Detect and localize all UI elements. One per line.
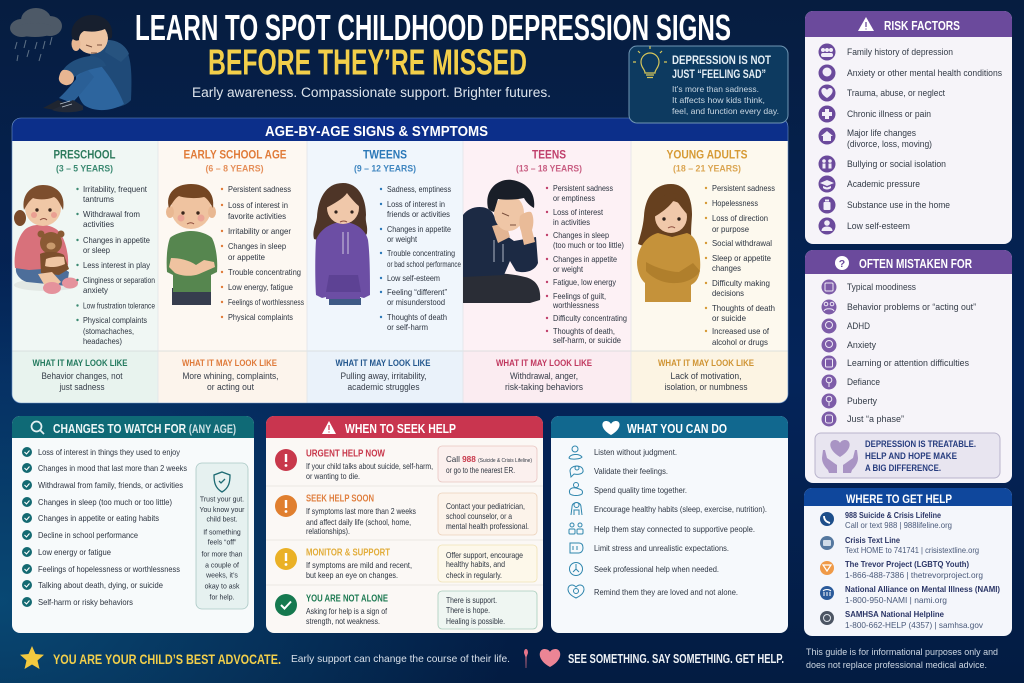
what it may look like: tweens: Pulling away, irritability, <box>340 371 426 381</box>
row: urgent help now: If your child talks about suicide, self-harm, <box>306 461 433 471</box>
icon: pin <box>524 649 528 668</box>
row: you are not alone: strength, not weakness. <box>306 616 380 626</box>
symptom list: preschool: Low frustration tolerance <box>83 300 155 310</box>
checklist: Decline in school performance <box>38 530 138 540</box>
symptom list: tweens: or self-harm <box>387 322 428 332</box>
row: seek help soon: relationships). <box>306 526 350 536</box>
column: tweens: (9 – 12 YEARS) <box>354 164 416 174</box>
what it may look like: young adults: WHAT IT MAY LOOK LIKE <box>658 358 754 369</box>
icons: support actions <box>568 446 584 598</box>
illustration: girl in purple hoodie <box>313 183 370 305</box>
symptom list: early school age: Physical complaints <box>228 312 293 322</box>
symptom list: preschool: or sleep <box>83 245 110 255</box>
column: young adults <box>637 148 775 392</box>
action list: Encourage healthy habits (sleep, exercise, nutrition). <box>594 504 767 514</box>
symptom list: teens <box>546 183 627 345</box>
callout: trust your gut: If something <box>203 530 241 536</box>
risk list: Bullying or social isolation <box>847 159 946 169</box>
column: young adults: YOUNG ADULTS <box>666 148 748 162</box>
column: tweens: TWEENS <box>363 148 407 162</box>
what it may look like: young adults <box>658 358 754 392</box>
symptom list: early school age: Low energy, fatigue <box>228 282 293 292</box>
checklist: Feelings of hopelessness or worthlessness <box>38 564 180 574</box>
disclaimer: This guide is for informational purposes only and <box>806 647 998 657</box>
symptom list: teens: in activities <box>553 217 590 227</box>
illustration: sad boy hugging knees <box>43 15 131 112</box>
footer banner <box>20 646 784 669</box>
helpline list: 988 Suicide & Crisis Lifeline <box>845 510 941 520</box>
column: early school age: (6 – 8 YEARS) <box>206 164 264 174</box>
subtitle: Early awareness. Compassionate support. Brighter futures. <box>192 85 551 100</box>
row: you are not alone: YOU ARE NOT ALONE <box>306 592 388 604</box>
symptom list: tweens <box>380 184 461 332</box>
callout: trust your gut: for more than <box>202 552 243 558</box>
helpline list <box>845 510 1000 630</box>
early support line: Early support can change the course of their life. <box>291 653 510 665</box>
symptom list: early school age: Feelings of worthlessness <box>228 297 304 307</box>
row: monitor and support: MONITOR & SUPPORT <box>306 546 390 558</box>
callout: trust your gut: Trust your gut. <box>200 496 244 504</box>
column: young adults: (18 – 21 YEARS) <box>673 164 741 174</box>
symptom list: teens: Loss of interest <box>553 207 604 217</box>
row: seek help soon: SEEK HELP SOON <box>306 492 374 504</box>
symptom list: early school age: Trouble concentrating <box>228 267 301 277</box>
row: monitor and support: Offer support, encourage <box>446 550 523 560</box>
symptom list: teens: Feelings of guilt, <box>553 291 606 301</box>
symptom list: young adults: Thoughts of death <box>712 303 775 313</box>
panel: when to seek help <box>266 416 543 633</box>
symptom list: tweens: Loss of interest in <box>387 199 445 209</box>
mistaken-for list <box>847 282 976 424</box>
icon: rain cloud <box>10 8 62 61</box>
callout: trust your gut: for help. <box>210 594 235 602</box>
what it may look like: early school age: or acting out <box>207 382 255 392</box>
symptom list: teens: Changes in appetite <box>553 254 617 264</box>
icon: hands holding heart <box>822 440 858 473</box>
what it may look like: teens: risk-taking behaviors <box>505 382 584 392</box>
symptom list: early school age: Irritability or anger <box>228 226 291 236</box>
symptom list: teens: (too much or too little) <box>553 240 624 250</box>
symptom list: early school age: Changes in sleep <box>228 241 286 251</box>
disclaimer: does not replace professional medical advice. <box>806 660 987 670</box>
heading: what you can do: WHAT YOU CAN DO <box>627 421 727 436</box>
symptom list: preschool: tantrums <box>83 194 114 204</box>
what it may look like: tweens: academic struggles <box>348 382 420 392</box>
symptom list: tweens: Trouble concentrating <box>387 248 455 258</box>
mistaken-for list: Learning or attention difficulties <box>847 358 969 368</box>
action list: Help them stay connected to supportive people. <box>594 524 755 534</box>
symptom list: young adults: decisions <box>712 288 744 298</box>
icons: mistaken for <box>822 280 836 426</box>
checklist: Changes in mood that last more than 2 weeks <box>38 463 187 473</box>
icons: risk factors <box>818 44 836 234</box>
symptom list: tweens: or bad school performance <box>387 259 461 269</box>
callout: depression is not just feeling sad <box>629 46 788 123</box>
see something slogan: SEE SOMETHING. SAY SOMETHING. GET HELP. <box>568 652 784 666</box>
symptom list: teens: or weight <box>553 264 584 274</box>
callout: depression is not just feeling sad: DEPRESSION IS NOT <box>672 55 771 67</box>
illustration: girl with teddy bear <box>14 185 78 294</box>
heading: risk factors <box>858 17 960 33</box>
what it may look like: preschool: WHAT IT MAY LOOK LIKE <box>32 358 128 369</box>
heading: often mistaken for <box>835 256 972 271</box>
symptom list: young adults: Sleep or appetite <box>712 253 771 263</box>
what it may look like: early school age: WHAT IT MAY LOOK LIKE <box>182 358 277 369</box>
row: you are not alone: There is support. <box>446 595 497 605</box>
action list: Spend quality time together. <box>594 485 687 495</box>
illustration: young adult with crossed arms <box>637 184 700 302</box>
checklist: Self-harm or risky behaviors <box>38 597 133 607</box>
heading: what you can do <box>602 421 727 436</box>
action list: Limit stress and unrealistic expectations. <box>594 543 729 553</box>
callout: depression is not just feeling sad: JUST “FEELING SAD” <box>672 69 766 81</box>
risk list: Trauma, abuse, or neglect <box>847 88 945 98</box>
row: seek help soon: school counselor, or a <box>446 511 512 521</box>
checklist: Low energy or fatigue <box>38 547 111 557</box>
symptom list: tweens: Thoughts of death <box>387 312 447 322</box>
column: early school age <box>166 148 304 392</box>
what it may look like: tweens <box>336 358 430 392</box>
heading: often mistaken for: OFTEN MISTAKEN FOR <box>859 256 972 271</box>
icon: shield <box>214 472 230 492</box>
symptom list: young adults: or suicide <box>712 313 746 323</box>
panel: what you can do <box>551 416 788 633</box>
row: urgent help now: Call 988 (Suicide & Crisis Lifeline) <box>446 454 532 464</box>
symptom list: preschool: activities <box>83 219 114 229</box>
symptom list: tweens: Changes in appetite <box>387 224 451 234</box>
helpline list: 1-800-662-HELP (4357) | samhsa.gov <box>845 620 984 630</box>
row: seek help soon: mental health professional. <box>446 521 529 531</box>
symptom list: preschool: (stomachaches, <box>83 326 134 336</box>
row: you are not alone: Asking for help is a sign of <box>306 606 388 616</box>
column: preschool: (3 – 5 YEARS) <box>56 164 113 174</box>
action list: Remind them they are loved and not alone. <box>594 587 738 597</box>
panel: changes to watch for <box>12 416 254 633</box>
symptom list: teens: or emptiness <box>553 193 595 203</box>
symptom list: teens: Changes in sleep <box>553 230 609 240</box>
risk list: Academic pressure <box>847 179 920 189</box>
advocate slogan: YOU ARE YOUR CHILD’S BEST ADVOCATE. <box>53 652 281 667</box>
helpline list: Text HOME to 741741 | crisistextline.org <box>845 545 979 555</box>
heading: age-by-age: AGE-BY-AGE SIGNS & SYMPTOMS <box>265 123 488 140</box>
mistaken-for list: Defiance <box>847 377 880 387</box>
callout: depression is treatable: DEPRESSION IS TREATABLE. <box>865 439 976 450</box>
checklist: Changes in appetite or eating habits <box>38 513 159 523</box>
symptom list: preschool: Irritability, frequent <box>83 184 148 194</box>
symptom list: teens: Difficulty concentrating <box>553 313 627 323</box>
heading: changes: CHANGES TO WATCH FOR (ANY AGE) <box>53 421 236 436</box>
mistaken-for list: Just “a phase” <box>847 414 904 424</box>
heading: often mistaken for: ? <box>839 258 845 270</box>
helpline list: The Trevor Project (LGBTQ Youth) <box>845 559 969 569</box>
title: BEFORE THEY’RE MISSED <box>208 42 527 82</box>
icon: heart <box>540 649 560 667</box>
callout: trust your gut: okay to ask <box>205 584 240 590</box>
column: preschool: PRESCHOOL <box>54 148 116 162</box>
column: early school age: EARLY SCHOOL AGE <box>184 148 286 162</box>
row: monitor and support: healthy habits, and <box>446 559 505 569</box>
symptom list: preschool: anxiety <box>83 285 109 295</box>
symptom list: early school age: Persistent sadness <box>228 184 291 194</box>
callout: depression is treatable: A BIG DIFFERENCE. <box>865 463 941 474</box>
action list: Seek professional help when needed. <box>594 564 719 574</box>
panel: where to get help <box>804 488 1012 636</box>
column: preschool <box>14 148 155 392</box>
row: seek help soon: and affect daily life (school, home, <box>306 517 411 527</box>
column: teens <box>463 148 627 392</box>
row: urgent help now <box>275 446 537 482</box>
panel: risk factors <box>805 11 1012 244</box>
helpline list: SAMHSA National Helpline <box>845 609 944 619</box>
helpline list: 1-800-950-NAMI | nami.org <box>845 595 947 605</box>
symptom list: preschool: Changes in appetite <box>83 235 150 245</box>
symptom list: teens: Persistent sadness <box>553 183 613 193</box>
panel: age-by-age signs and symptoms <box>12 118 788 403</box>
symptom list: teens: Thoughts of death, <box>553 326 615 336</box>
row: monitor and support: check in regularly. <box>446 570 502 580</box>
symptom list: young adults: Social withdrawal <box>712 238 772 248</box>
callout: depression is treatable: HELP AND HOPE MAKE <box>865 451 957 462</box>
symptom list: preschool: Withdrawal from <box>83 209 140 219</box>
checklist: Changes in sleep (too much or too little) <box>38 497 172 507</box>
icon: magnifier <box>32 422 44 434</box>
what it may look like: preschool: just sadness <box>59 382 105 392</box>
mistaken-for list: Behavior problems or “acting out” <box>847 302 976 312</box>
mistaken-for list: Anxiety <box>847 340 876 350</box>
callout: trust your gut: child best. <box>206 516 238 524</box>
symptom list: early school age: favorite activities <box>228 211 286 221</box>
what it may look like: young adults: Lack of motivation, <box>670 371 742 381</box>
symptom list: preschool: Clinginess or separation <box>83 275 155 285</box>
title <box>135 7 731 82</box>
action list <box>594 447 767 597</box>
symptom list: young adults: or purpose <box>712 224 749 234</box>
symptom list: teens: self-harm, or suicide <box>553 335 621 345</box>
checklist: Loss of interest in things they used to enjoy <box>38 447 181 457</box>
symptom list: young adults: Persistent sadness <box>712 183 775 193</box>
symptom list: teens: Fatigue, low energy <box>553 277 617 287</box>
risk list <box>847 47 1002 231</box>
callout: trust your gut: a couple of <box>205 562 239 570</box>
heading: risk factors: RISK FACTORS <box>884 18 960 33</box>
column: teens: (13 – 18 YEARS) <box>516 164 582 174</box>
icon: star <box>20 646 44 669</box>
row: you are not alone: Healing is possible. <box>446 616 505 626</box>
row: monitor and support: If symptoms are mild and recent, <box>306 560 412 570</box>
symptom list: young adults: alcohol or drugs <box>712 337 768 347</box>
action list: Listen without judgment. <box>594 447 677 457</box>
symptom list: early school age <box>221 184 304 322</box>
helpline list: National Alliance on Mental Illness (NAMI) <box>845 584 1000 594</box>
heading: when to seek help: WHEN TO SEEK HELP <box>345 421 456 436</box>
risk list: Family history of depression <box>847 47 953 57</box>
row: monitor and support <box>275 545 537 582</box>
panel: often mistaken for <box>805 250 1012 483</box>
title: LEARN TO SPOT CHILDHOOD DEPRESSION SIGNS <box>135 7 731 48</box>
risk list: Substance use in the home <box>847 200 950 210</box>
symptom list: tweens: Sadness, emptiness <box>387 184 451 194</box>
callout: trust your gut: feels “off” <box>208 540 237 546</box>
illustration: teen holding head <box>463 180 540 303</box>
symptom list: early school age: Loss of interest in <box>228 200 288 210</box>
row: urgent help now: URGENT HELP NOW <box>306 448 385 460</box>
what it may look like: tweens: WHAT IT MAY LOOK LIKE <box>336 358 430 369</box>
symptom list: young adults: Loss of direction <box>712 213 768 223</box>
mistaken-for list: ADHD <box>847 321 870 331</box>
symptom list: young adults: Increased use of <box>712 326 770 336</box>
what it may look like: early school age: More whining, complaints, <box>182 371 278 381</box>
what it may look like: teens <box>496 358 592 392</box>
symptom list: tweens: Feeling “different” <box>387 287 447 297</box>
action list: Validate their feelings. <box>594 466 668 476</box>
symptom list: preschool: headaches) <box>83 336 122 346</box>
checklist: Withdrawal from family, friends, or activities <box>38 480 183 490</box>
illustration: boy with crossed arms <box>166 184 217 305</box>
symptom list: preschool: Physical complaints <box>83 315 147 325</box>
row: seek help soon <box>275 492 537 536</box>
symptom list: tweens: or misunderstood <box>387 297 445 307</box>
mistaken-for list: Puberty <box>847 396 877 406</box>
symptom list: young adults: changes <box>712 263 741 273</box>
row: seek help soon: If symptoms last more than 2 weeks <box>306 506 416 516</box>
callout: trust your gut <box>196 463 248 609</box>
symptom list: young adults <box>705 183 775 347</box>
row: you are not alone <box>275 591 537 629</box>
symptom list: tweens: or weight <box>387 234 418 244</box>
symptom list: young adults: Hopelessness <box>712 198 758 208</box>
row: urgent help now: or go to the nearest ER. <box>446 465 515 475</box>
mistaken-for list: Typical moodiness <box>847 282 916 292</box>
symptom list: preschool: Less interest in play <box>83 260 151 270</box>
callout: depression is treatable <box>815 433 1000 478</box>
risk list: (divorce, loss, moving) <box>847 139 932 149</box>
what it may look like: early school age <box>182 358 278 392</box>
callout: depression is not just feeling sad: feel, and function every day. <box>672 106 779 116</box>
symptom list: teens: worthlessness <box>552 300 599 310</box>
what it may look like: preschool: Behavior changes, not <box>42 371 123 381</box>
checklist: Talking about death, dying, or suicide <box>38 580 163 590</box>
icons: helplines <box>820 512 834 625</box>
symptom list: tweens: Low self-esteem <box>387 273 440 283</box>
risk list: Low self-esteem <box>847 221 910 231</box>
row: you are not alone: There is hope. <box>446 605 490 615</box>
row: urgent help now: or wanting to die. <box>306 471 360 481</box>
checklist <box>22 447 187 607</box>
heading: where to get help: WHERE TO GET HELP <box>846 492 952 506</box>
heading: when to seek help <box>322 421 456 436</box>
callout: depression is not just feeling sad: It’s more than sadness. <box>672 84 759 94</box>
callout: depression is not just feeling sad: It affects how kids think, <box>672 95 765 105</box>
what it may look like: young adults: isolation, or numbness <box>664 382 748 392</box>
what it may look like: teens: Withdrawal, anger, <box>510 371 578 381</box>
risk list: Chronic illness or pain <box>847 109 931 119</box>
row: seek help soon: Contact your pediatrician, <box>446 501 525 511</box>
callout: trust your gut: weeks, it’s <box>205 572 238 580</box>
helpline list: Crisis Text Line <box>845 535 900 545</box>
symptom list: preschool <box>76 184 155 346</box>
callout: trust your gut: You know your <box>200 507 245 514</box>
symptom list: young adults: Difficulty making <box>712 278 770 288</box>
column: tweens <box>313 148 461 392</box>
risk list: Major life changes <box>847 128 916 138</box>
row: monitor and support: but keep an eye on changes. <box>306 570 398 580</box>
what it may look like: preschool <box>32 358 128 392</box>
what it may look like: teens: WHAT IT MAY LOOK LIKE <box>496 358 592 369</box>
disclaimer <box>806 647 998 670</box>
icon: light bulb <box>633 46 667 78</box>
symptom list: early school age: or appetite <box>228 252 265 262</box>
risk list: Anxiety or other mental health conditions <box>847 68 1002 78</box>
helpline list: Call or text 988 | 988lifeline.org <box>845 520 952 530</box>
helpline list: 1-866-488-7386 | thetrevorproject.org <box>845 570 983 580</box>
symptom list: tweens: friends or activities <box>387 209 450 219</box>
column: teens: TEENS <box>532 148 566 162</box>
